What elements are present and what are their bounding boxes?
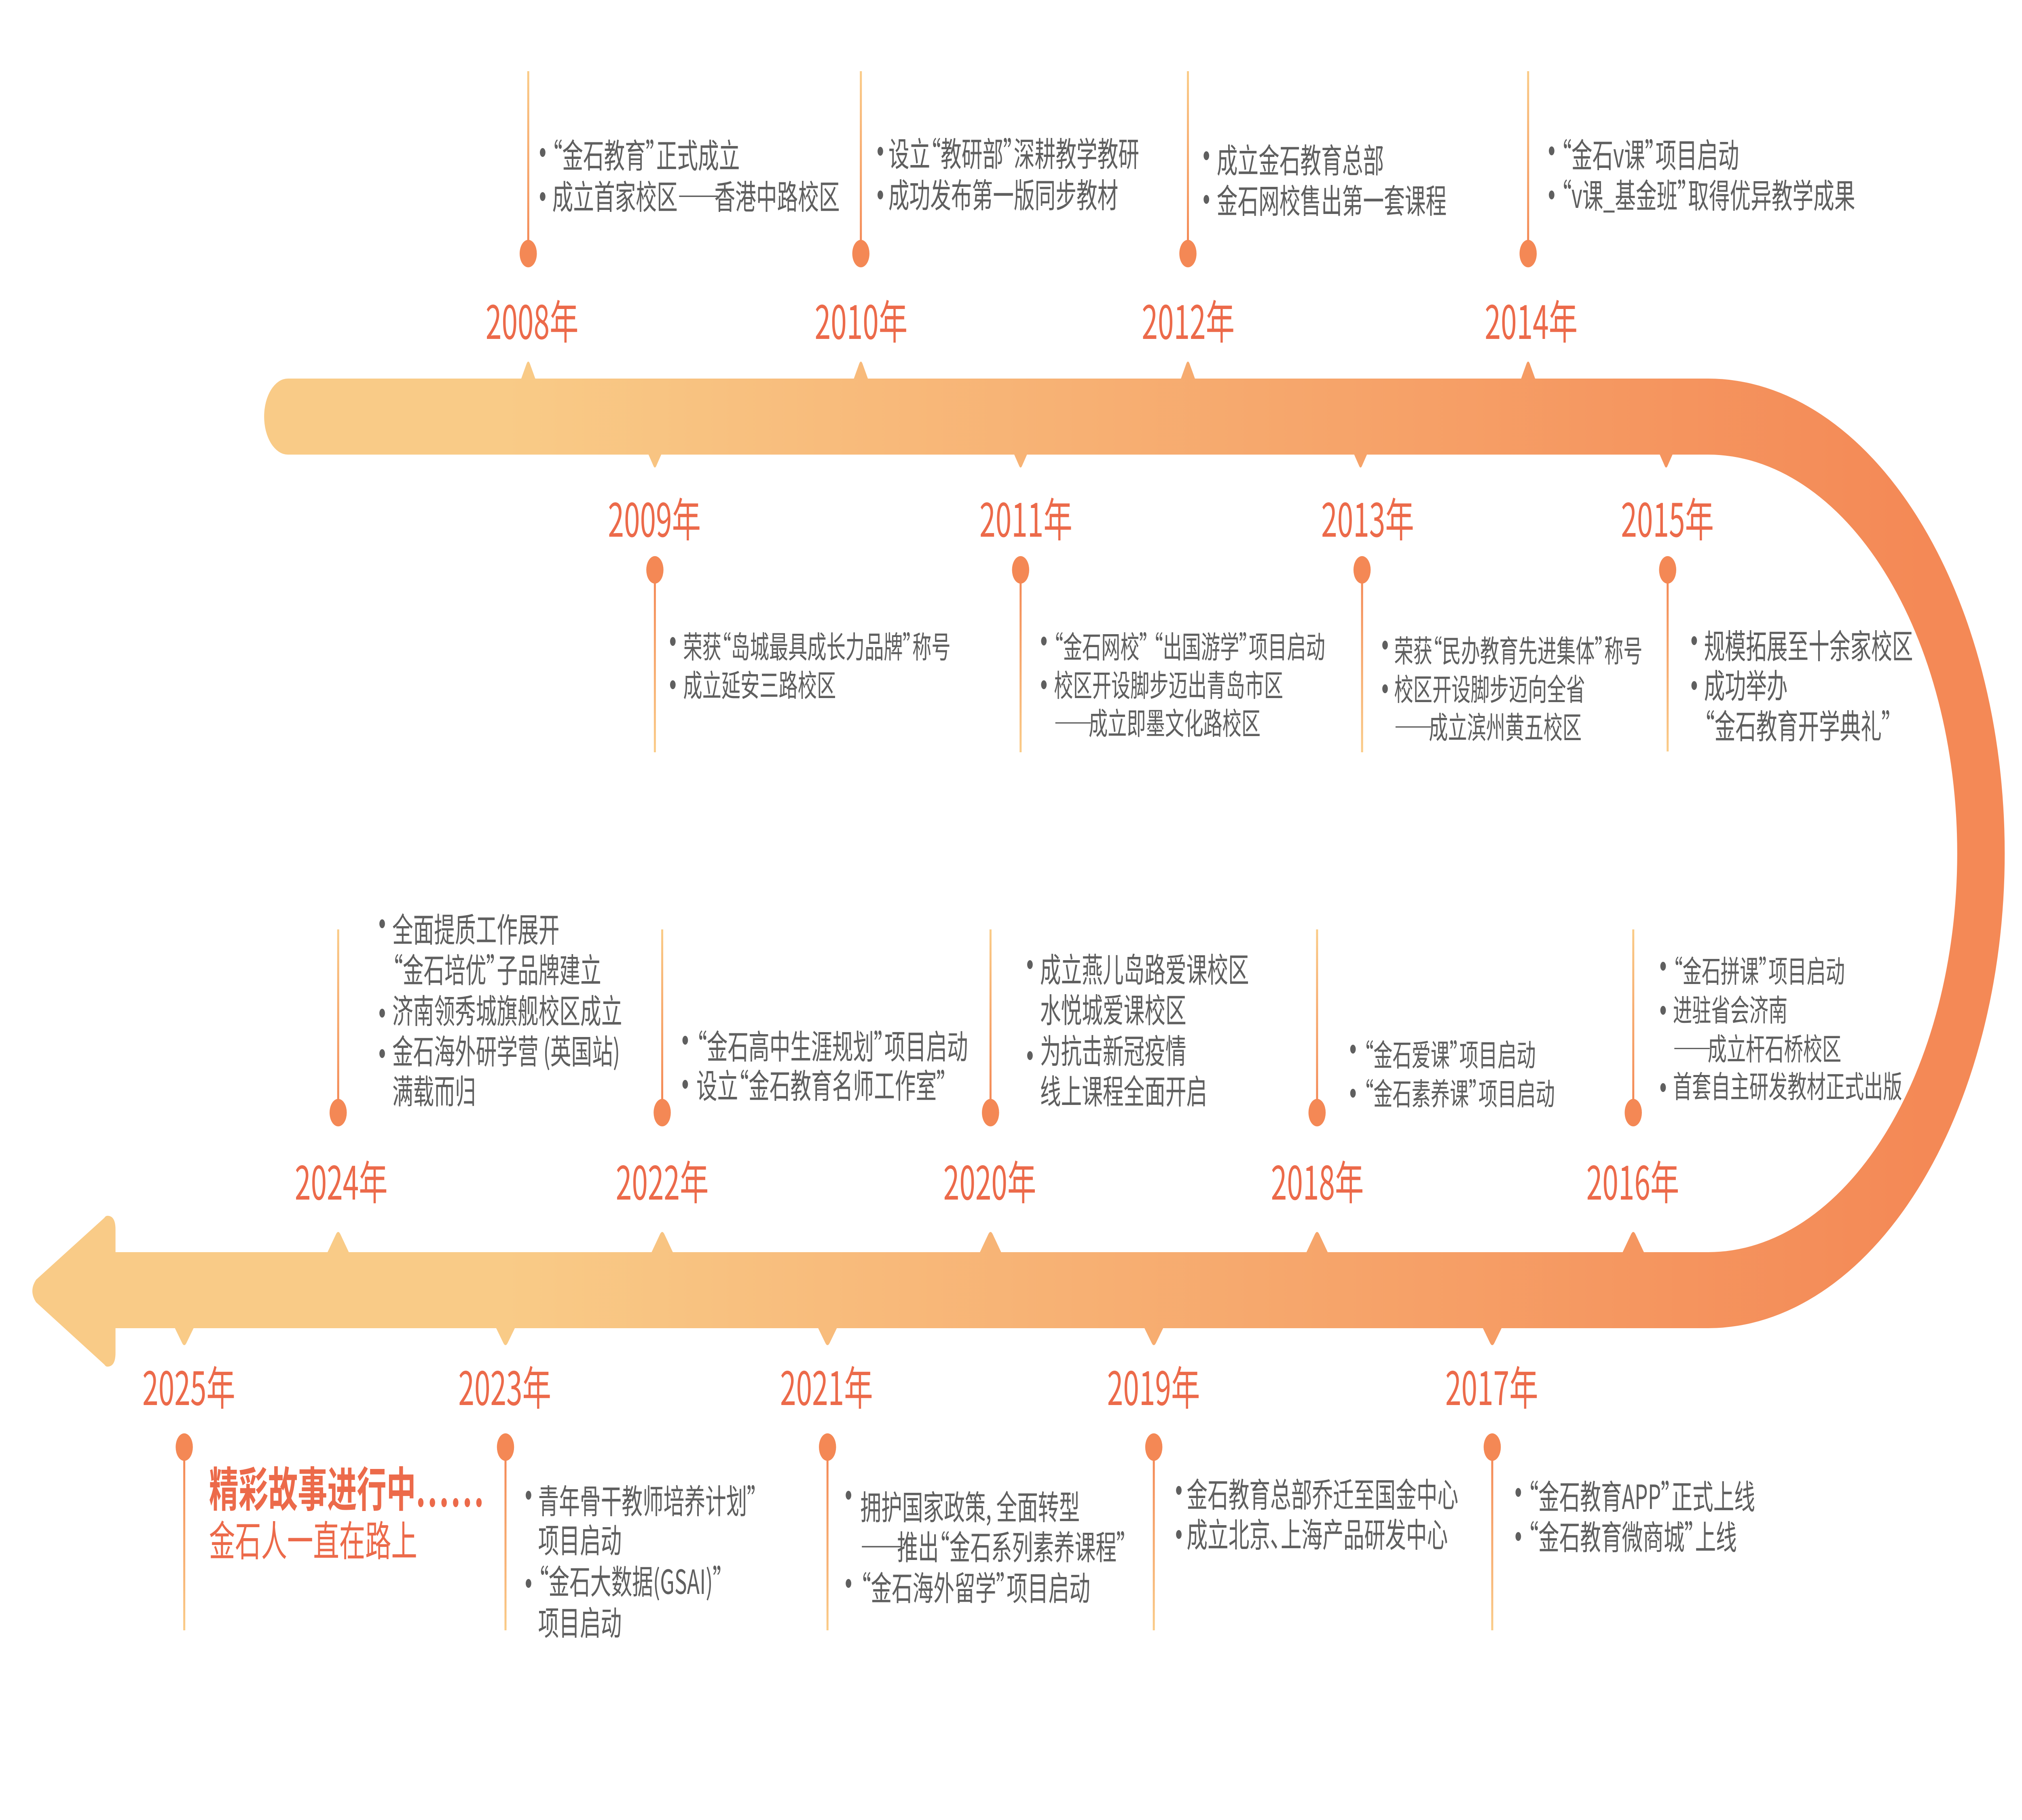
year: 2025年 — [142, 1352, 235, 1419]
description: “金石高中生涯规划”项目启动 — [696, 1020, 968, 1069]
year: 2022年 — [616, 1147, 709, 1213]
description: 设立“金石教育名师工作室” — [696, 1059, 947, 1108]
year: 2013年 — [1321, 484, 1414, 550]
description — [526, 1475, 757, 1645]
dot — [819, 1433, 836, 1461]
year: 2008年 — [486, 286, 578, 353]
description: “金石拼课”项目启动 — [1673, 948, 1845, 992]
description: 金石海外研学营 (英国站) — [392, 1025, 620, 1073]
year: 2009年 — [608, 484, 701, 550]
milestone: 2019 — [1107, 1327, 1458, 1630]
tick — [1180, 362, 1195, 380]
closing callout: 精彩故事进行中...... — [209, 1452, 486, 1521]
description: “金石教育开学典礼” — [1704, 700, 1892, 748]
description — [1176, 1468, 1458, 1557]
description: 水悦城爱课校区 — [1040, 984, 1187, 1032]
description: 进驻省会济南 — [1673, 986, 1787, 1031]
milestone: 2020 — [943, 929, 1249, 1254]
year: 2010年 — [815, 286, 907, 353]
description: 拥护国家政策, 全面转型 — [861, 1481, 1080, 1529]
milestone: 2012 — [1142, 71, 1447, 380]
description: 成功发布第一版同步教材 — [888, 169, 1118, 217]
year: 2021年 — [780, 1352, 873, 1419]
description: 校区开设脚步迈向全省 — [1394, 666, 1585, 710]
description — [1203, 134, 1447, 223]
tick — [1521, 362, 1536, 380]
connector — [1019, 578, 1022, 752]
tick — [1659, 453, 1673, 468]
description: “金石爱课”项目启动 — [1364, 1031, 1536, 1075]
description: ——成立杆石桥校区 — [1673, 1025, 1841, 1069]
milestone: 2008 — [486, 71, 840, 380]
description: 成功举办 — [1704, 659, 1787, 708]
dot — [176, 1433, 193, 1461]
dot — [1659, 556, 1676, 584]
dot — [1625, 1099, 1642, 1126]
description — [670, 623, 951, 706]
milestone: 2021 — [780, 1327, 1127, 1630]
description — [878, 127, 1139, 217]
description: ——成立滨州黄五校区 — [1394, 704, 1582, 748]
milestone: 2017 — [1445, 1327, 1755, 1630]
description: 线上课程全面开启 — [1040, 1065, 1207, 1113]
tick — [817, 1327, 838, 1345]
description — [1691, 620, 1913, 748]
tick — [1144, 1327, 1164, 1345]
description: “金石教育微商城”上线 — [1528, 1511, 1737, 1559]
tick — [327, 1232, 349, 1254]
description: 首套自主研发教材正式出版 — [1673, 1063, 1902, 1107]
milestone: 2009 — [608, 453, 951, 752]
description — [1549, 129, 1855, 218]
dot — [520, 240, 537, 267]
description — [379, 903, 622, 1113]
milestone: 2013 — [1321, 453, 1643, 752]
description: ——推出“金石系列素养课程” — [861, 1521, 1127, 1569]
tick — [979, 1232, 1002, 1254]
connector — [527, 71, 529, 245]
dot — [1012, 556, 1029, 584]
connector — [1153, 1456, 1155, 1630]
description — [1660, 948, 1902, 1107]
dot — [852, 240, 869, 267]
tick — [1482, 1327, 1502, 1345]
tick — [648, 453, 662, 468]
description: 成立北京、上海产品研发中心 — [1187, 1508, 1448, 1557]
description: 荣获“岛城最具成长力品牌”称号 — [683, 623, 951, 667]
description — [683, 1020, 968, 1108]
description: 成立燕儿岛路爱课校区 — [1040, 943, 1249, 992]
description — [1516, 1470, 1755, 1559]
connector — [827, 1456, 829, 1630]
description — [846, 1481, 1127, 1610]
description: “金石教育APP”正式上线 — [1528, 1470, 1755, 1519]
description — [1041, 623, 1325, 744]
tick — [651, 1232, 674, 1254]
description: 为抗击新冠疫情 — [1040, 1024, 1187, 1073]
dot — [654, 1099, 671, 1126]
year: 2024年 — [295, 1147, 387, 1213]
milestone: 2014 — [1485, 71, 1855, 380]
description: “金石培优”子品牌建立 — [392, 944, 601, 992]
connector — [1632, 929, 1634, 1103]
connector — [654, 578, 656, 752]
tick — [174, 1327, 195, 1345]
description: 荣获“民办教育先进集体”称号 — [1394, 627, 1643, 671]
tick — [853, 362, 869, 380]
connector — [505, 1456, 506, 1630]
description — [1027, 943, 1249, 1113]
tick — [1306, 1232, 1328, 1254]
timeline band with arrow — [32, 379, 2005, 1367]
year: 2023年 — [458, 1352, 551, 1419]
description: 规模拓展至十余家校区 — [1704, 620, 1913, 668]
tick — [1354, 453, 1368, 468]
description: 济南领秀城旗舰校区成立 — [392, 984, 622, 1033]
tick — [1013, 453, 1028, 468]
description: 金石教育总部乔迁至国金中心 — [1187, 1468, 1458, 1517]
tick — [1622, 1232, 1645, 1254]
description: 青年骨干教师培养计划” — [538, 1475, 757, 1523]
milestone: 2018 — [1271, 929, 1555, 1254]
description: “金石教育”正式成立 — [552, 129, 740, 178]
connector — [337, 929, 339, 1103]
connector — [860, 71, 862, 245]
description: “v课_基金班”取得优异教学成果 — [1561, 169, 1855, 218]
description — [1350, 1031, 1555, 1114]
milestone: 2023 — [458, 1327, 757, 1645]
dot — [1179, 240, 1197, 267]
description: 校区开设脚步迈出青岛市区 — [1054, 662, 1283, 706]
year: 2020年 — [943, 1147, 1036, 1213]
connector — [1361, 578, 1363, 752]
milestone: 2010 — [815, 71, 1139, 380]
milestone: 2022 — [616, 929, 968, 1254]
year: 2012年 — [1142, 286, 1235, 353]
closing callout — [209, 1452, 486, 1568]
dot — [646, 556, 664, 584]
dot — [1520, 240, 1537, 267]
tick — [521, 362, 536, 380]
connector — [183, 1456, 185, 1630]
description: 金石网校售出第一套课程 — [1217, 174, 1447, 223]
milestone: 2011 — [979, 453, 1325, 752]
description: “金石网校” “出国游学”项目启动 — [1053, 623, 1325, 667]
tick — [495, 1327, 516, 1345]
description — [540, 129, 840, 219]
description: 项目启动 — [538, 1596, 622, 1645]
description: 成立延安三路校区 — [683, 662, 836, 706]
milestone: 2025 — [142, 1327, 486, 1630]
description — [1382, 627, 1643, 748]
description: 成立首家校区——香港中路校区 — [552, 170, 840, 219]
dot — [1354, 556, 1371, 584]
description: 项目启动 — [538, 1514, 622, 1562]
connector — [1667, 578, 1669, 751]
dot — [330, 1099, 347, 1126]
connector — [1527, 71, 1529, 245]
description: 全面提质工作展开 — [392, 903, 559, 952]
dot — [982, 1099, 999, 1126]
year: 2011年 — [979, 484, 1072, 550]
connector — [1491, 1456, 1493, 1630]
description: ——成立即墨文化路校区 — [1054, 700, 1261, 744]
dot — [497, 1433, 514, 1461]
description: 设立“教研部”深耕教学教研 — [888, 127, 1139, 176]
year: 2014年 — [1485, 286, 1578, 353]
connector — [1316, 929, 1318, 1103]
description: “金石大数据(GSAI)” — [538, 1555, 723, 1604]
description: “金石v课”项目启动 — [1561, 129, 1739, 177]
year: 2017年 — [1445, 1352, 1538, 1419]
description: 成立金石教育总部 — [1217, 134, 1384, 182]
dot — [1309, 1099, 1326, 1126]
year: 2015年 — [1621, 484, 1714, 550]
dot — [1484, 1433, 1501, 1461]
milestone: 2016 — [1586, 929, 1902, 1254]
year: 2016年 — [1586, 1147, 1679, 1213]
year: 2019年 — [1107, 1352, 1200, 1419]
connector — [1187, 71, 1189, 245]
connector — [990, 929, 992, 1103]
closing callout: 金石人一直在路上 — [209, 1507, 417, 1568]
description: “金石海外留学”项目启动 — [861, 1562, 1090, 1610]
connector — [661, 929, 663, 1103]
dot — [1145, 1433, 1162, 1461]
milestone: 2024 — [295, 903, 622, 1254]
year: 2018年 — [1271, 1147, 1364, 1213]
milestone: 2015 — [1621, 453, 1913, 751]
description: 满载而归 — [392, 1065, 476, 1113]
description: “金石素养课”项目启动 — [1364, 1070, 1555, 1114]
